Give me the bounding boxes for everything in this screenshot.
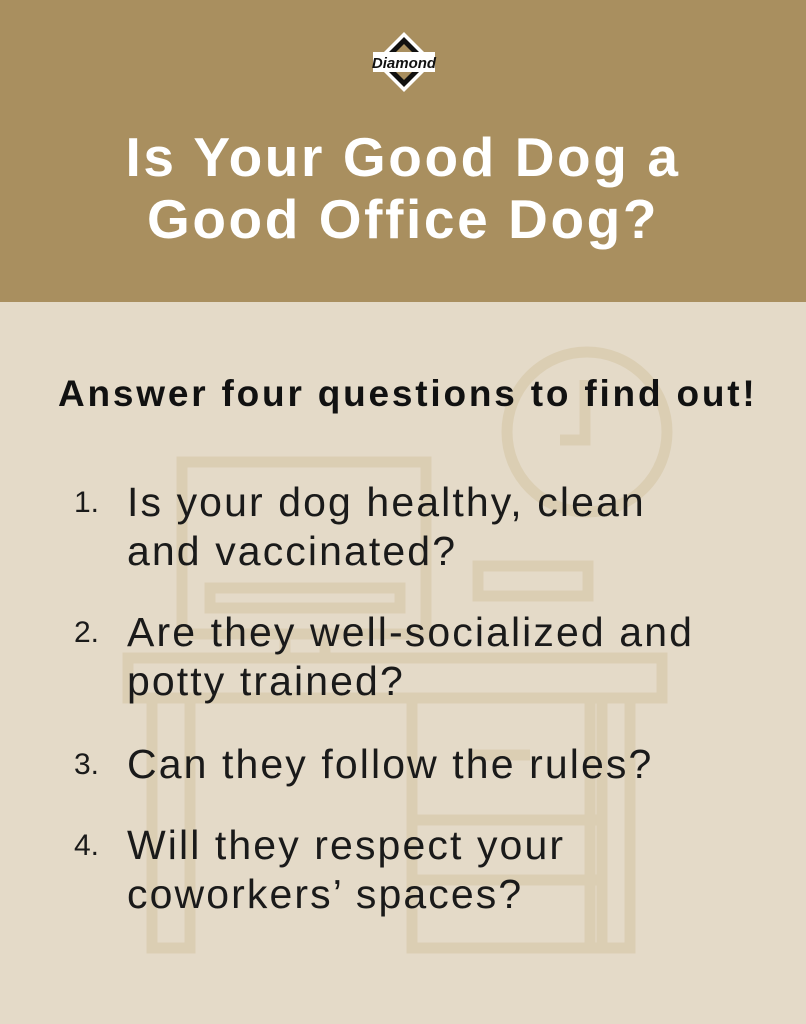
title: Good Office Dog? bbox=[147, 188, 659, 250]
question 2: 2. bbox=[74, 616, 99, 649]
question 1 bbox=[74, 479, 646, 574]
question 4: coworkers’ spaces? bbox=[127, 871, 523, 917]
question 2: Are they well-socialized and bbox=[127, 609, 694, 655]
question 1: and vaccinated? bbox=[127, 528, 457, 574]
question 2 bbox=[74, 609, 694, 704]
question 4 bbox=[74, 822, 565, 917]
title: Is Your Good Dog a bbox=[125, 126, 681, 188]
subtitle: Answer four questions to find out! bbox=[58, 373, 758, 414]
logo bbox=[372, 32, 437, 92]
question 1: Is your dog healthy, clean bbox=[127, 479, 646, 525]
question 1: 1. bbox=[74, 486, 99, 519]
question 3: 3. bbox=[74, 748, 99, 781]
question 4: 4. bbox=[74, 829, 99, 862]
logo: Diamond bbox=[372, 55, 437, 72]
header band bbox=[0, 0, 806, 302]
question 2: potty trained? bbox=[127, 658, 405, 704]
question 3: Can they follow the rules? bbox=[127, 741, 653, 787]
question 4: Will they respect your bbox=[127, 822, 565, 868]
title bbox=[125, 126, 681, 250]
